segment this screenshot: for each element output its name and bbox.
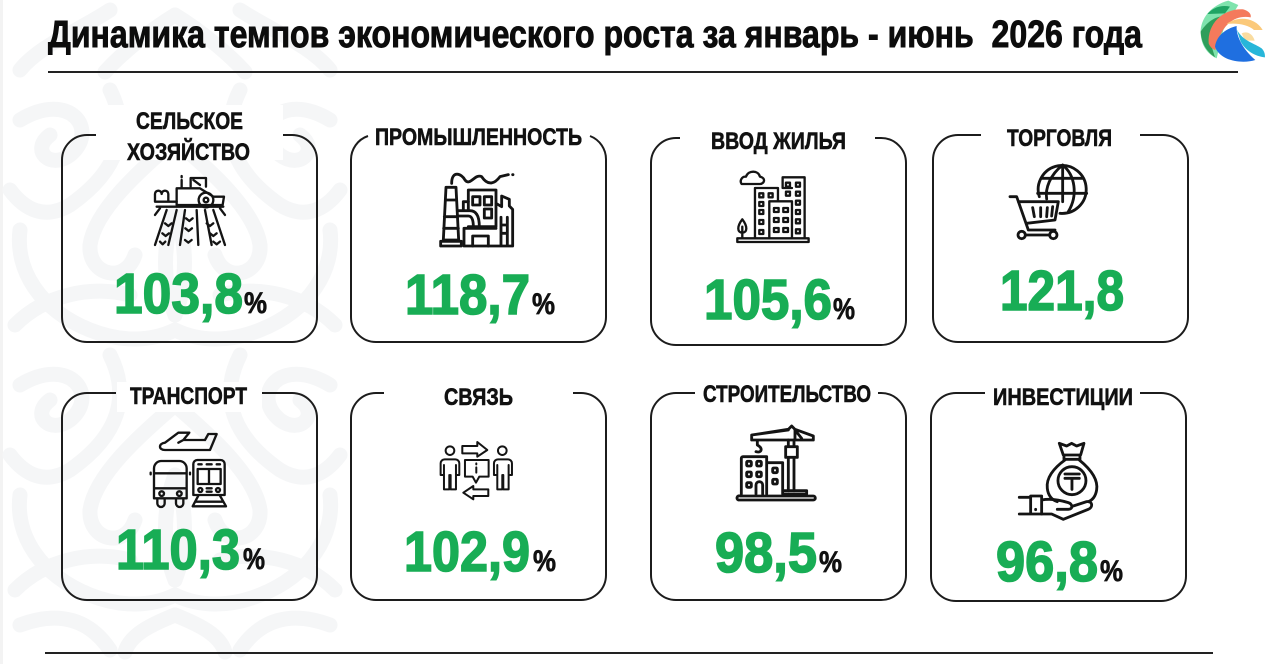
card: construction <box>651 381 906 600</box>
card: investment <box>931 384 1186 601</box>
card frame <box>62 393 317 600</box>
percent: % <box>243 543 265 576</box>
value: 110,3 <box>116 518 240 582</box>
percent: % <box>532 288 555 321</box>
card: communications <box>351 384 606 600</box>
card: housing <box>651 128 906 345</box>
card: trade <box>933 125 1188 342</box>
icon: cart and globe <box>1010 165 1087 239</box>
card frame <box>651 138 906 345</box>
value: 96,8 <box>996 530 1098 594</box>
card: transport <box>62 382 317 600</box>
label: ВВОД ЖИЛЬЯ <box>711 128 846 155</box>
bottom rule <box>45 652 1213 654</box>
percent: % <box>833 293 855 326</box>
label: ТОРГОВЛЯ <box>1007 125 1112 152</box>
label: ИНВЕСТИЦИИ <box>993 384 1133 411</box>
card frame <box>351 393 606 600</box>
card frame <box>351 136 606 342</box>
percent: % <box>244 287 267 320</box>
card frame <box>931 393 1186 601</box>
card: industry <box>351 124 606 342</box>
top rule <box>48 71 1238 73</box>
icon: people exchanging information <box>441 442 512 499</box>
percent: % <box>1100 555 1123 588</box>
label: СВЯЗЬ <box>444 384 513 411</box>
label backing <box>117 382 262 412</box>
label: ТРАНСПОРТ <box>130 383 247 410</box>
icon: factory <box>441 174 513 246</box>
value: 121,8 <box>1000 259 1124 323</box>
percent: % <box>819 546 842 579</box>
icon: crane and buildings <box>737 426 815 500</box>
percent: % <box>533 545 556 578</box>
value: 105,6 <box>704 268 832 332</box>
icon: buildings <box>737 172 809 242</box>
logo <box>1201 1 1265 62</box>
icon: tractor <box>155 176 225 245</box>
card: agriculture <box>62 105 317 342</box>
label line 2: ХОЗЯЙСТВО <box>127 138 250 166</box>
label backing <box>96 105 283 160</box>
value: 118,7 <box>405 263 530 327</box>
card frame <box>933 135 1188 342</box>
background ornament <box>0 0 340 664</box>
value: 103,8 <box>114 262 243 326</box>
card frame <box>651 393 906 600</box>
label: СЕЛЬСКОЕ <box>136 108 243 135</box>
card frame <box>62 135 317 342</box>
label: ПРОМЫШЛЕННОСТЬ <box>375 124 582 151</box>
icon: money bag in hand <box>1019 443 1097 519</box>
value: 102,9 <box>404 520 530 584</box>
icon: plane, bus, train <box>151 433 226 507</box>
label: СТРОИТЕЛЬСТВО <box>703 381 871 408</box>
value: 98,5 <box>715 521 817 585</box>
